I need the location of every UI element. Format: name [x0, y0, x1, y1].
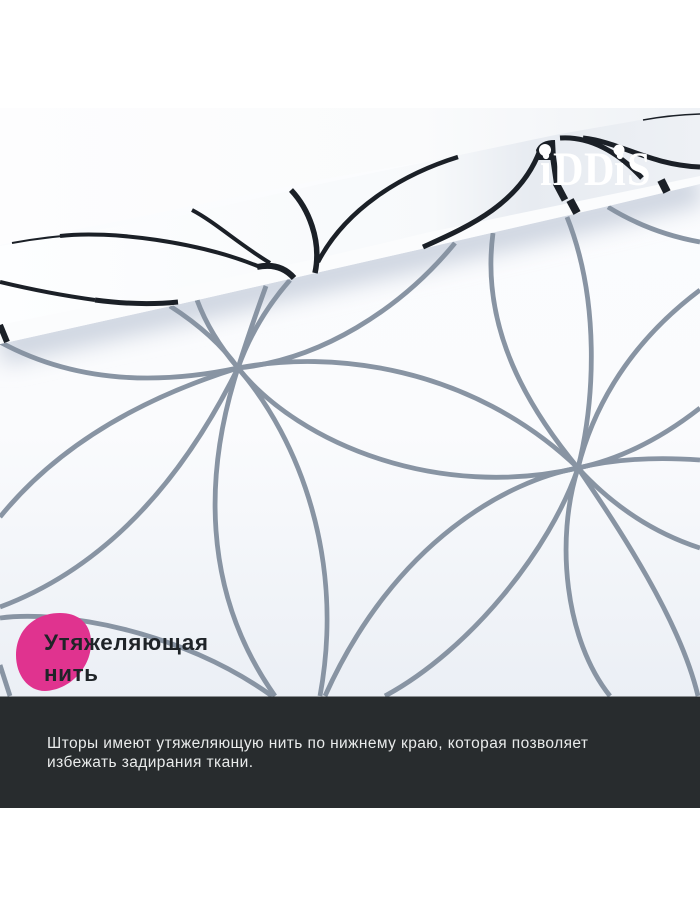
heading: [44, 630, 208, 686]
caption text: [47, 735, 588, 771]
photo: curtain fabric: [0, 108, 700, 697]
infographic canvas: [0, 108, 700, 808]
hem shadow: [0, 188, 700, 348]
black pattern on hem: [0, 114, 700, 342]
folded hem band: [0, 114, 700, 344]
heading: нить: [44, 661, 98, 686]
hem lower lip: [0, 176, 700, 344]
grey printed circle pattern: [0, 207, 700, 696]
pink blob accent: [16, 613, 91, 691]
caption text: Шторы имеют утяжеляющую нить по нижнему краю, которая позволяет: [47, 735, 588, 752]
dark caption panel: [0, 696, 700, 808]
caption text: избежать задирания ткани.: [47, 754, 253, 771]
heading: Утяжеляющая: [44, 630, 208, 655]
logo: iDDiS: iDDiS: [540, 143, 650, 196]
